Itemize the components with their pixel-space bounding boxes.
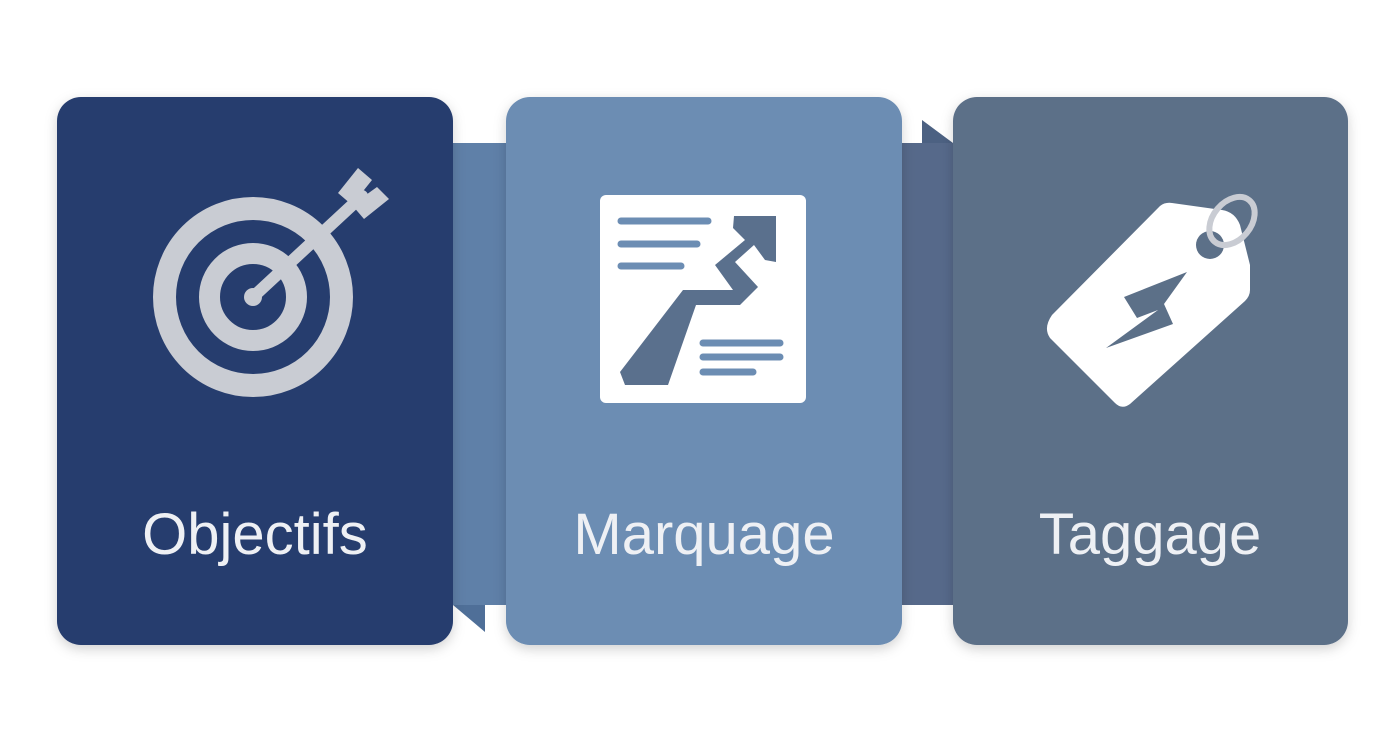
label: Marquage: Marquage xyxy=(573,502,835,567)
icon: chart document xyxy=(600,195,806,403)
panel: marquage xyxy=(506,97,902,645)
icon: price tag xyxy=(1047,188,1264,407)
panel: taggage xyxy=(953,97,1348,645)
label: Taggage: Taggage xyxy=(1039,502,1261,567)
panel: objectifs xyxy=(57,97,453,645)
icon: target xyxy=(164,168,389,386)
connector: marquage to taggage xyxy=(898,120,956,605)
label: Objectifs: Objectifs xyxy=(142,502,368,567)
connector: objectifs to marquage xyxy=(450,143,510,632)
